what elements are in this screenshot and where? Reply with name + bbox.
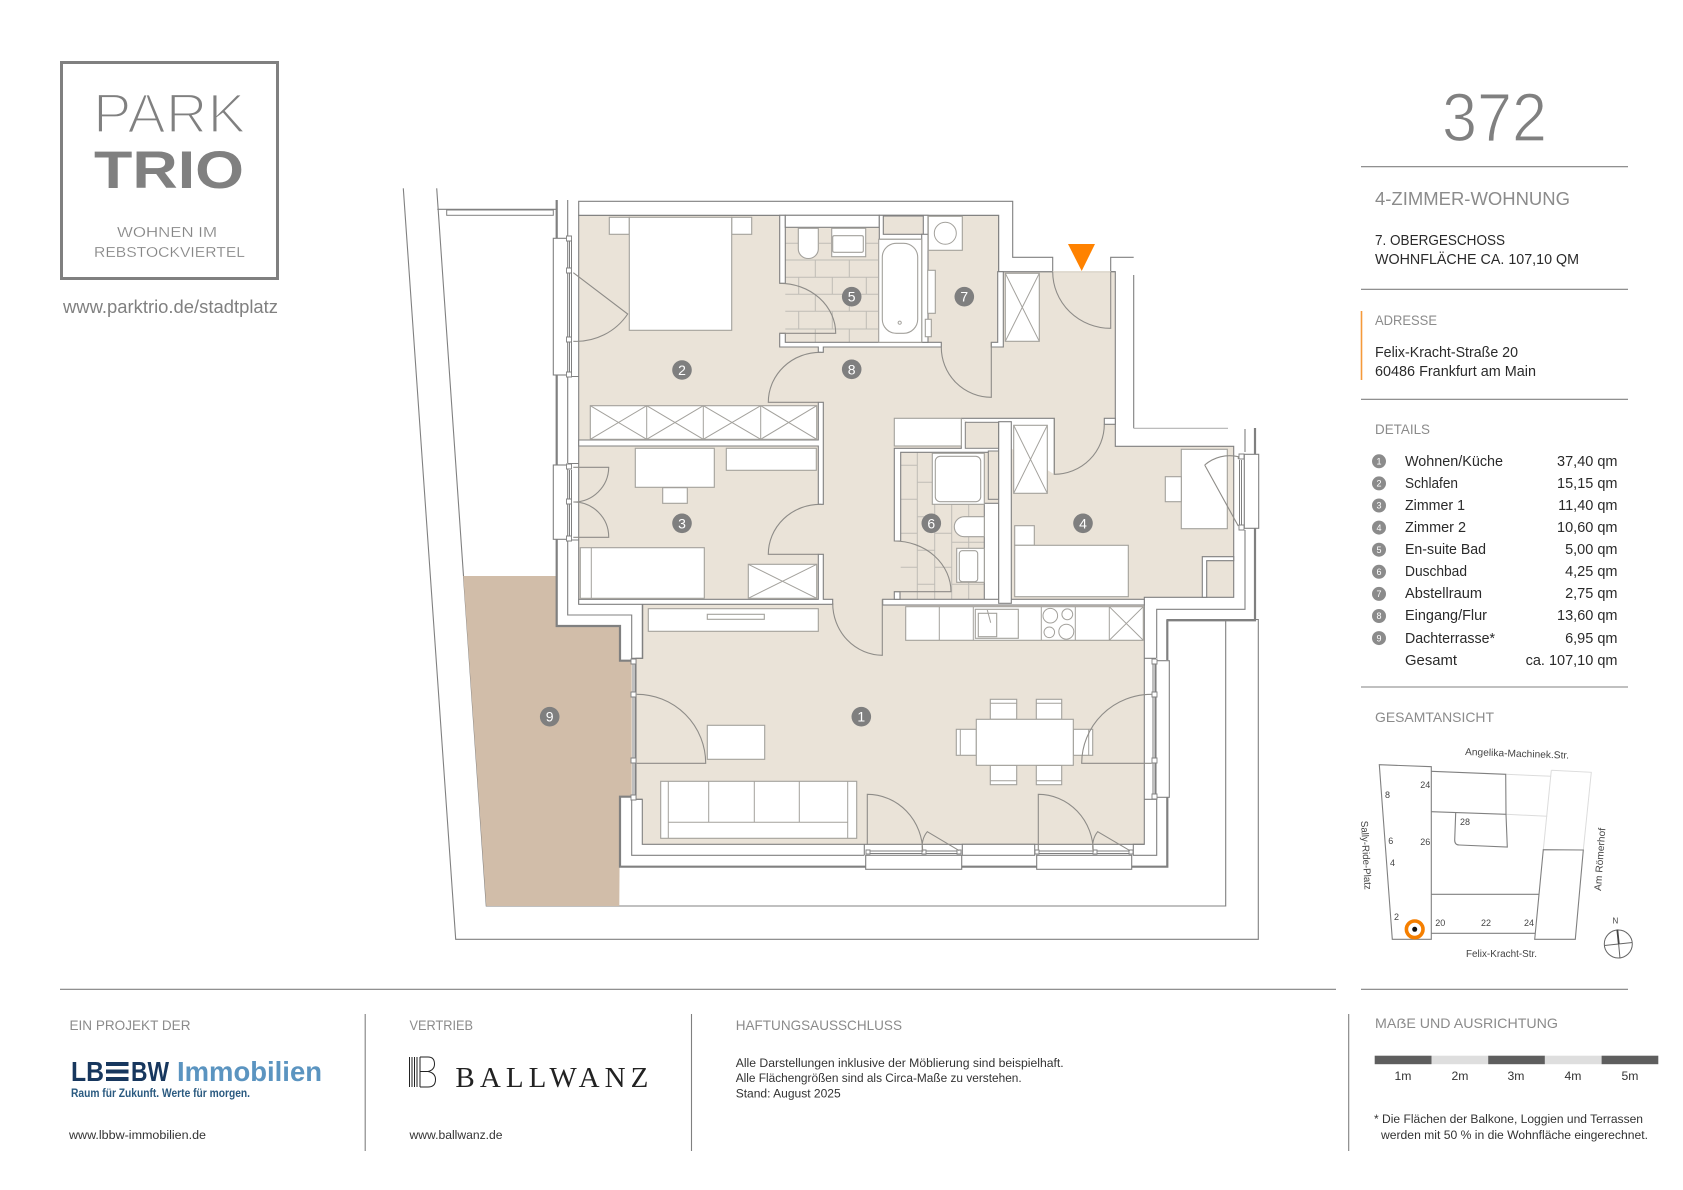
row 7: 7: [1376, 589, 1382, 599]
bathroom tiles: [785, 243, 984, 599]
row 1: [1372, 454, 1618, 470]
room number 4: 4: [1079, 515, 1087, 531]
house numbers: 26: [1420, 837, 1430, 847]
room number 8: [842, 360, 862, 379]
LBBW logo: Raum für Zukunft. Werte für morgen.: [71, 1086, 250, 1100]
row 8: 13,60 qm: [1557, 608, 1618, 624]
row 9: Dachterrasse*: [1405, 631, 1495, 647]
house numbers: 28: [1460, 817, 1470, 827]
row 1: 37,40 qm: [1557, 454, 1618, 470]
footer: disclaimer: Alle Darstellungen inklusive der Möblierung sind beispielhaft.: [736, 1056, 1064, 1070]
floor plan: [403, 188, 1259, 939]
room number 4: [1073, 514, 1093, 533]
footnote: werden mit 50 % in die Wohnfläche eingerechnet.: [1380, 1128, 1648, 1142]
row 5: En-suite Bad: [1405, 542, 1486, 558]
footer: disclaimer: HAFTUNGSAUSSCHLUSS: [736, 1017, 902, 1033]
apartment number: 372: [1442, 79, 1547, 156]
LBBW logo: [71, 1056, 322, 1100]
address: ADRESSE: [1375, 312, 1437, 328]
apartment floor: [579, 215, 1234, 844]
room number 7: [954, 287, 974, 307]
apartment summary: [1361, 167, 1628, 289]
room number 1: 1: [857, 709, 865, 725]
apartment summary: 4-ZIMMER-WOHNUNG: [1375, 189, 1570, 209]
house numbers: 20: [1435, 918, 1445, 928]
scale bar: 2m: [1452, 1069, 1468, 1083]
footer: scale: MAẞE UND AUSRICHTUNG: [1375, 1015, 1558, 1031]
house numbers: [1385, 780, 1534, 928]
hallway and room wardrobes: [1005, 273, 1047, 493]
row 3: 3: [1376, 501, 1382, 511]
house numbers: 4: [1390, 858, 1395, 868]
row 8: 8: [1376, 611, 1382, 621]
room number 5: 5: [848, 289, 856, 305]
row 3: [1372, 498, 1618, 514]
footnote: [1374, 1112, 1648, 1142]
street names: Sally-Ride-Platz: [1358, 821, 1373, 890]
bedroom furniture: [590, 217, 817, 439]
street names: Angelika-Machinek.Str.: [1465, 747, 1569, 762]
row 3: Zimmer 1: [1405, 498, 1465, 514]
row 5: [1372, 542, 1618, 558]
room number 9: 9: [546, 709, 554, 725]
street names: [1358, 747, 1608, 960]
row 6: [1372, 564, 1618, 580]
footer: sales: [409, 1017, 648, 1142]
footer: project developer: EIN PROJEKT DER: [70, 1017, 190, 1033]
divider: [690, 1014, 692, 1151]
row 2: Schlafen: [1405, 476, 1458, 492]
house numbers: 24: [1524, 918, 1534, 928]
site overview map: GESAMTANSICHT: [1375, 709, 1494, 725]
footer rule right: [1361, 988, 1628, 990]
total row: [1405, 653, 1618, 669]
room number 1: [852, 707, 871, 726]
street names: Felix-Kracht-Str.: [1466, 949, 1537, 960]
row 4: 4: [1376, 523, 1382, 533]
row 1: 1: [1376, 456, 1382, 466]
compass: [1604, 916, 1632, 958]
site overview map: [1358, 709, 1632, 960]
row 7: [1372, 586, 1618, 602]
room number 9: [540, 707, 560, 726]
divider: [1348, 1014, 1350, 1151]
details table: DETAILS: [1375, 421, 1430, 437]
room number 6: 6: [927, 515, 935, 531]
scale bar: 4m: [1565, 1069, 1581, 1083]
footer rule left: [60, 988, 1336, 990]
entrance marker: [1068, 244, 1095, 271]
row 5: 5: [1376, 545, 1382, 555]
room 3 furniture: [580, 448, 817, 598]
row 9: 9: [1376, 633, 1382, 643]
row 2: [1372, 476, 1618, 492]
row 8: Eingang/Flur: [1405, 608, 1487, 624]
row 9: 6,95 qm: [1565, 631, 1618, 647]
divider: [364, 1014, 366, 1151]
kitchen: [906, 607, 1143, 640]
scale bar: 1m: [1395, 1069, 1411, 1083]
logo: Park Trio: TRIO: [94, 141, 244, 200]
row 6: 4,25 qm: [1565, 564, 1618, 580]
row 6: 6: [1376, 567, 1382, 577]
LBBW logo: Immobilien: [177, 1056, 322, 1087]
apartment summary: 7. OBERGESCHOSS: [1375, 233, 1505, 249]
outer walls: [557, 200, 1255, 867]
footer: disclaimer: Alle Flächengrößen sind als Circa-Maße zu verstehen.: [736, 1071, 1022, 1085]
row 4: 10,60 qm: [1557, 520, 1618, 536]
address: 60486 Frankfurt am Main: [1375, 364, 1536, 380]
site boundary lines: [403, 188, 1258, 939]
row 3: 11,40 qm: [1558, 498, 1618, 514]
row 2: 15,15 qm: [1557, 476, 1618, 492]
room 4 furniture: [1015, 449, 1227, 597]
windows: [553, 236, 1259, 869]
LBBW logo: BW: [131, 1056, 169, 1087]
row 9: [1372, 631, 1618, 647]
row 4: [1372, 520, 1618, 536]
row 6: Duschbad: [1405, 564, 1467, 580]
storage room fixtures: [925, 216, 962, 337]
scale bar: [1375, 1056, 1658, 1083]
total row: ca. 107,10 qm: [1526, 653, 1618, 669]
apartment summary: WOHNFLÄCHE CA. 107,10 QM: [1375, 251, 1579, 268]
living room furniture: [648, 609, 1093, 838]
footer: sales: www.ballwanz.de: [409, 1128, 503, 1142]
logo: Park Trio: WOHNEN IM: [117, 225, 217, 241]
site outline buildings: [1379, 765, 1591, 939]
en-suite bath fixtures: [798, 228, 922, 342]
footer: scale: [1374, 1015, 1658, 1142]
Ballwanz logo: [410, 1057, 648, 1094]
total row: Gesamt: [1405, 653, 1457, 669]
row 1: Wohnen/Küche: [1405, 454, 1503, 470]
street names: Am Römerhof: [1593, 827, 1608, 891]
logo: Park Trio: REBSTOCKVIERTEL: [94, 245, 245, 261]
footer: disclaimer: [736, 1017, 1064, 1100]
room number 8: 8: [848, 361, 856, 377]
scale bar: 3m: [1508, 1069, 1524, 1083]
house numbers: 6: [1388, 836, 1393, 846]
shower bath fixtures: [932, 453, 984, 582]
LBBW logo: LB: [71, 1056, 104, 1087]
interior walls: [579, 215, 1234, 605]
room number 3: [672, 514, 692, 533]
room number 2: [672, 360, 692, 380]
row 4: Zimmer 2: [1405, 520, 1466, 536]
footer: sales: VERTRIEB: [410, 1017, 473, 1033]
address: Felix-Kracht-Straße 20: [1375, 345, 1518, 361]
location marker: [1406, 921, 1423, 938]
room number 7: 7: [960, 289, 968, 305]
house numbers: 2: [1394, 912, 1399, 922]
footer: project developer: www.lbbw-immobilien.de: [68, 1128, 206, 1142]
house numbers: 24: [1420, 780, 1430, 790]
footnote: * Die Flächen der Balkone, Loggien und Terrassen: [1374, 1112, 1643, 1126]
row 5: 5,00 qm: [1565, 542, 1618, 558]
house numbers: 22: [1481, 918, 1491, 928]
Ballwanz logo: BALLWANZ: [455, 1062, 648, 1094]
row 2: 2: [1376, 479, 1382, 489]
website link: www.parktrio.de/stadtplatz: [62, 296, 278, 317]
row 7: 2,75 qm: [1565, 586, 1618, 602]
footer: disclaimer: Stand: August 2025: [736, 1086, 841, 1100]
address: [1361, 311, 1628, 399]
room number 2: 2: [678, 362, 686, 378]
logo: Park Trio: PARK: [93, 82, 246, 144]
room number 3: 3: [678, 515, 686, 531]
logo: Park Trio: [62, 62, 278, 278]
scale bar: 5m: [1622, 1069, 1638, 1083]
row 8: [1372, 608, 1618, 624]
room number 6: [922, 514, 941, 533]
row 7: Abstellraum: [1405, 586, 1482, 602]
details table: [1361, 421, 1628, 687]
footer: project developer: [68, 1017, 322, 1142]
compass: N: [1612, 916, 1618, 926]
house numbers: 8: [1385, 790, 1390, 800]
terrace floor: [463, 576, 632, 906]
room number 5: [842, 287, 862, 307]
doors: [573, 272, 1238, 852]
